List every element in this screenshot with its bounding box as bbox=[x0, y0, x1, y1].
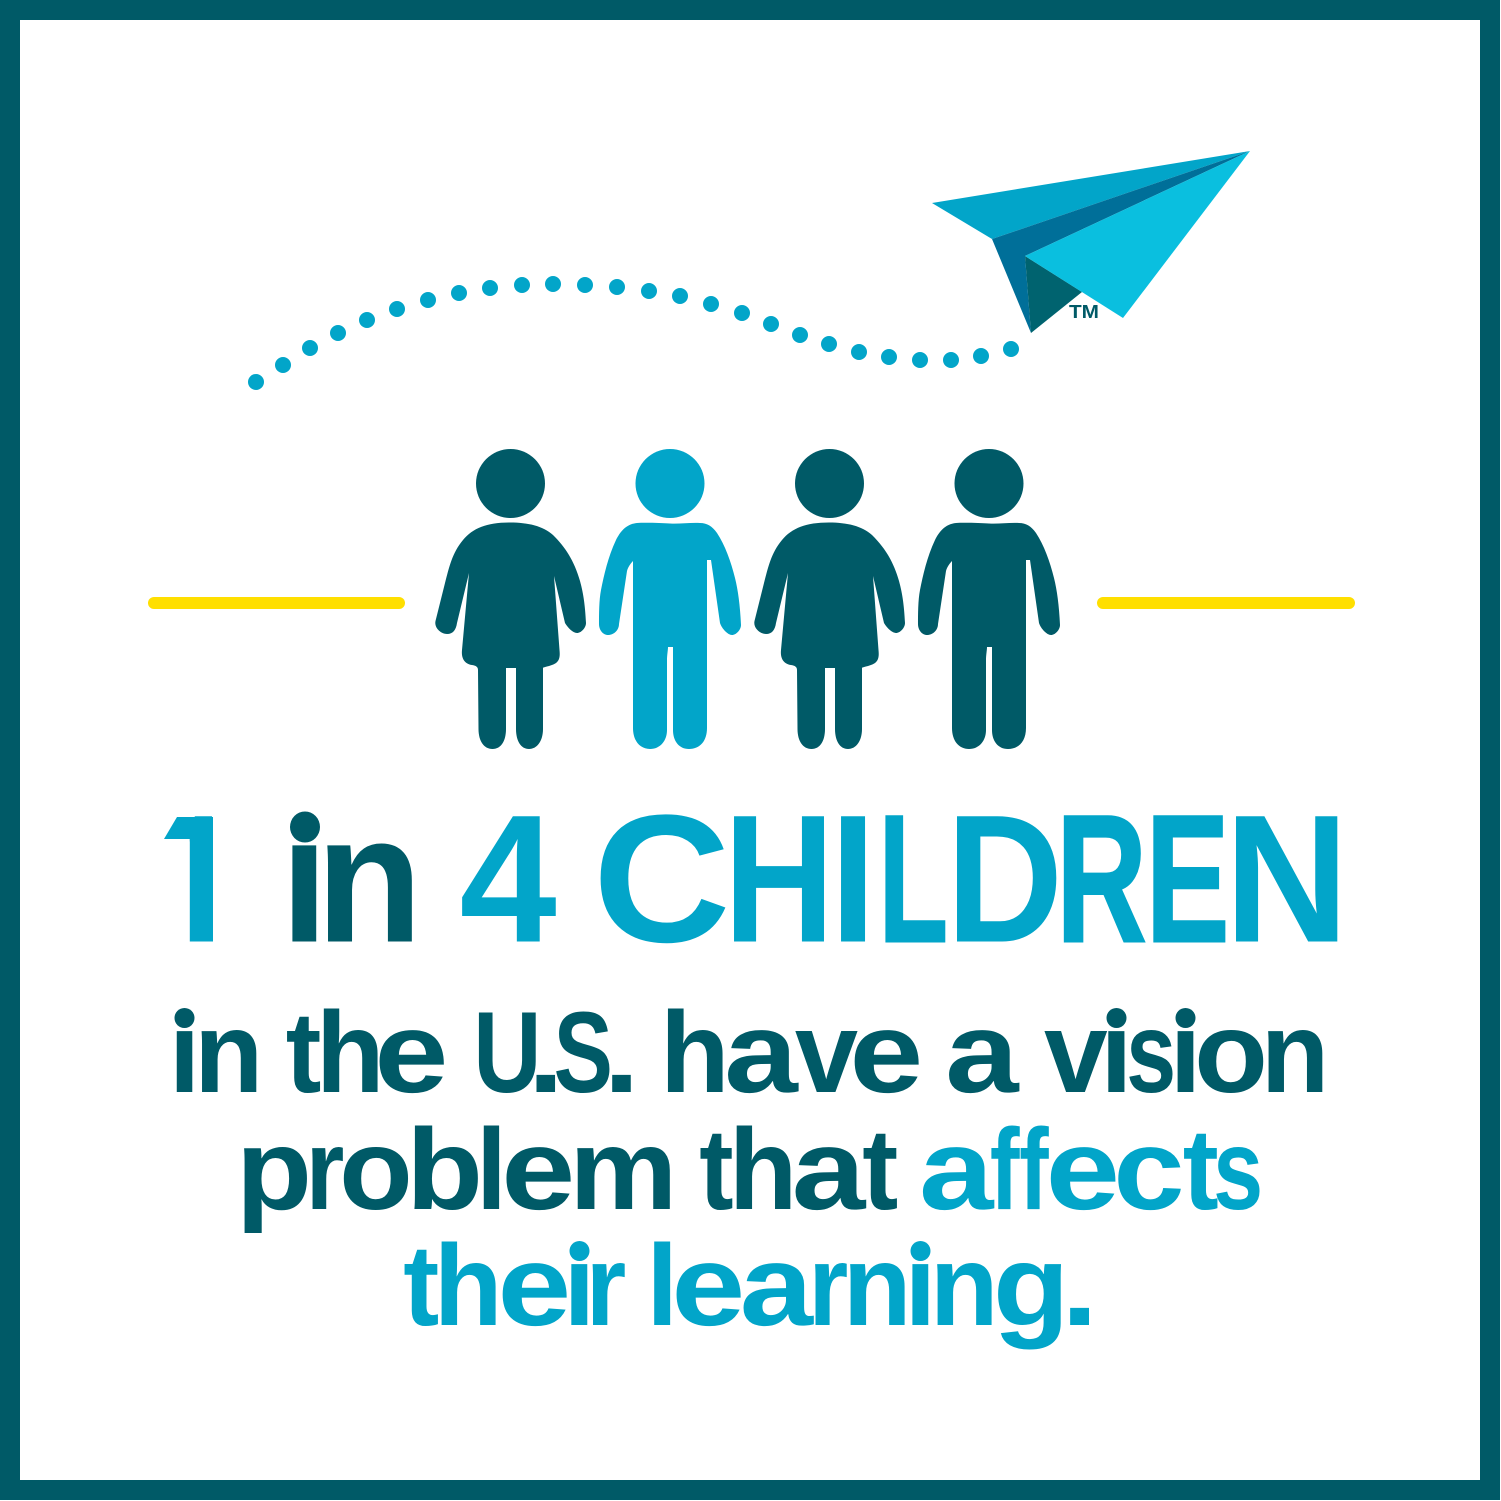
line 3: a bbox=[740, 1222, 814, 1350]
line 1: h bbox=[316, 989, 384, 1117]
icon: child figure 2 (boy, highlighted) bbox=[599, 449, 741, 749]
line 2: p bbox=[236, 1106, 312, 1234]
round dots of i in line 3 bbox=[568, 1236, 932, 1262]
word: CHILDREN: R bbox=[1056, 776, 1147, 980]
line 2: f bbox=[990, 1106, 1020, 1234]
line 1: a bbox=[724, 989, 799, 1117]
line 2: l bbox=[476, 1106, 507, 1234]
right yellow line bbox=[1097, 597, 1355, 609]
word: CHILDREN: E bbox=[1146, 776, 1230, 980]
word: CHILDREN: H bbox=[724, 776, 834, 980]
line 3: r bbox=[586, 1222, 626, 1350]
line 2: s bbox=[1213, 1106, 1263, 1234]
line 1: . bbox=[528, 989, 564, 1117]
line 2: t bbox=[1183, 1106, 1219, 1234]
line 2: e bbox=[501, 1106, 575, 1234]
line 1: e bbox=[850, 989, 923, 1117]
word: CHILDREN: L bbox=[878, 776, 948, 980]
word: CHILDREN: I bbox=[830, 776, 876, 980]
left yellow line bbox=[148, 597, 405, 609]
line 3: i bbox=[563, 1222, 596, 1350]
line 3: t bbox=[403, 1222, 439, 1350]
line 2: t bbox=[862, 1106, 898, 1234]
line 3: l bbox=[646, 1222, 678, 1350]
line 1: n bbox=[194, 989, 263, 1117]
icon: child figure 4 (boy) bbox=[918, 449, 1060, 749]
line 1: i bbox=[1170, 989, 1201, 1117]
line 3: r bbox=[808, 1222, 848, 1350]
line 3: h bbox=[434, 1222, 502, 1350]
line 1: v bbox=[795, 989, 858, 1117]
line 3: n bbox=[843, 1222, 912, 1350]
line 1: U bbox=[473, 989, 542, 1117]
line 1: h bbox=[660, 989, 730, 1117]
line 2: a bbox=[919, 1106, 995, 1234]
word: CHILDREN: N bbox=[1224, 776, 1349, 980]
icon: child figure 1 (girl) bbox=[435, 449, 586, 749]
line 1: n bbox=[1261, 989, 1329, 1117]
line 1: t bbox=[286, 989, 321, 1117]
icon: paper airplane bbox=[932, 151, 1250, 333]
word: in: n bbox=[316, 776, 423, 980]
line 3: e bbox=[498, 1222, 571, 1350]
line 1: s bbox=[1126, 989, 1176, 1117]
word: CHILDREN: D bbox=[946, 776, 1063, 980]
line 2: f bbox=[1019, 1106, 1049, 1234]
line 2: e bbox=[1046, 1106, 1120, 1234]
line 2: o bbox=[339, 1106, 413, 1234]
line 1: e bbox=[374, 989, 448, 1117]
line 2: b bbox=[406, 1106, 483, 1234]
round dots of i in line 1 bbox=[173, 1003, 1197, 1029]
line 1: . bbox=[603, 989, 640, 1117]
line 1: o bbox=[1194, 989, 1268, 1117]
line 3: g bbox=[993, 1222, 1069, 1350]
dotted flight path bbox=[248, 276, 1019, 390]
line 2: t bbox=[699, 1106, 734, 1234]
round dot of headline i bbox=[288, 804, 322, 844]
line 3: . bbox=[1061, 1222, 1098, 1350]
line 1: v bbox=[1044, 989, 1108, 1117]
line 2: h bbox=[729, 1106, 797, 1234]
subheading text bbox=[169, 989, 1329, 1350]
line 3: n bbox=[930, 1222, 998, 1350]
line 3: i bbox=[904, 1222, 936, 1350]
headline: 1 in 4 children bbox=[164, 812, 1338, 944]
line 1: a bbox=[945, 989, 1020, 1117]
numeral 1 bbox=[164, 816, 213, 942]
line 2: a bbox=[792, 1106, 867, 1234]
line 1: S bbox=[554, 989, 613, 1117]
line 2: c bbox=[1113, 1106, 1185, 1234]
line 1: i bbox=[1100, 989, 1133, 1117]
line 2: m bbox=[569, 1106, 677, 1234]
numeral 4: 4 bbox=[460, 776, 557, 980]
numeral 1: 1 bbox=[164, 776, 236, 980]
icon: child figure 3 (girl) bbox=[754, 449, 905, 749]
line 1: i bbox=[169, 989, 200, 1117]
line 2: r bbox=[306, 1106, 344, 1234]
icon: paper airplane: TM bbox=[1069, 302, 1099, 322]
word: in: i bbox=[280, 776, 328, 980]
word: CHILDREN: C bbox=[593, 776, 731, 980]
line 3: e bbox=[671, 1222, 745, 1350]
